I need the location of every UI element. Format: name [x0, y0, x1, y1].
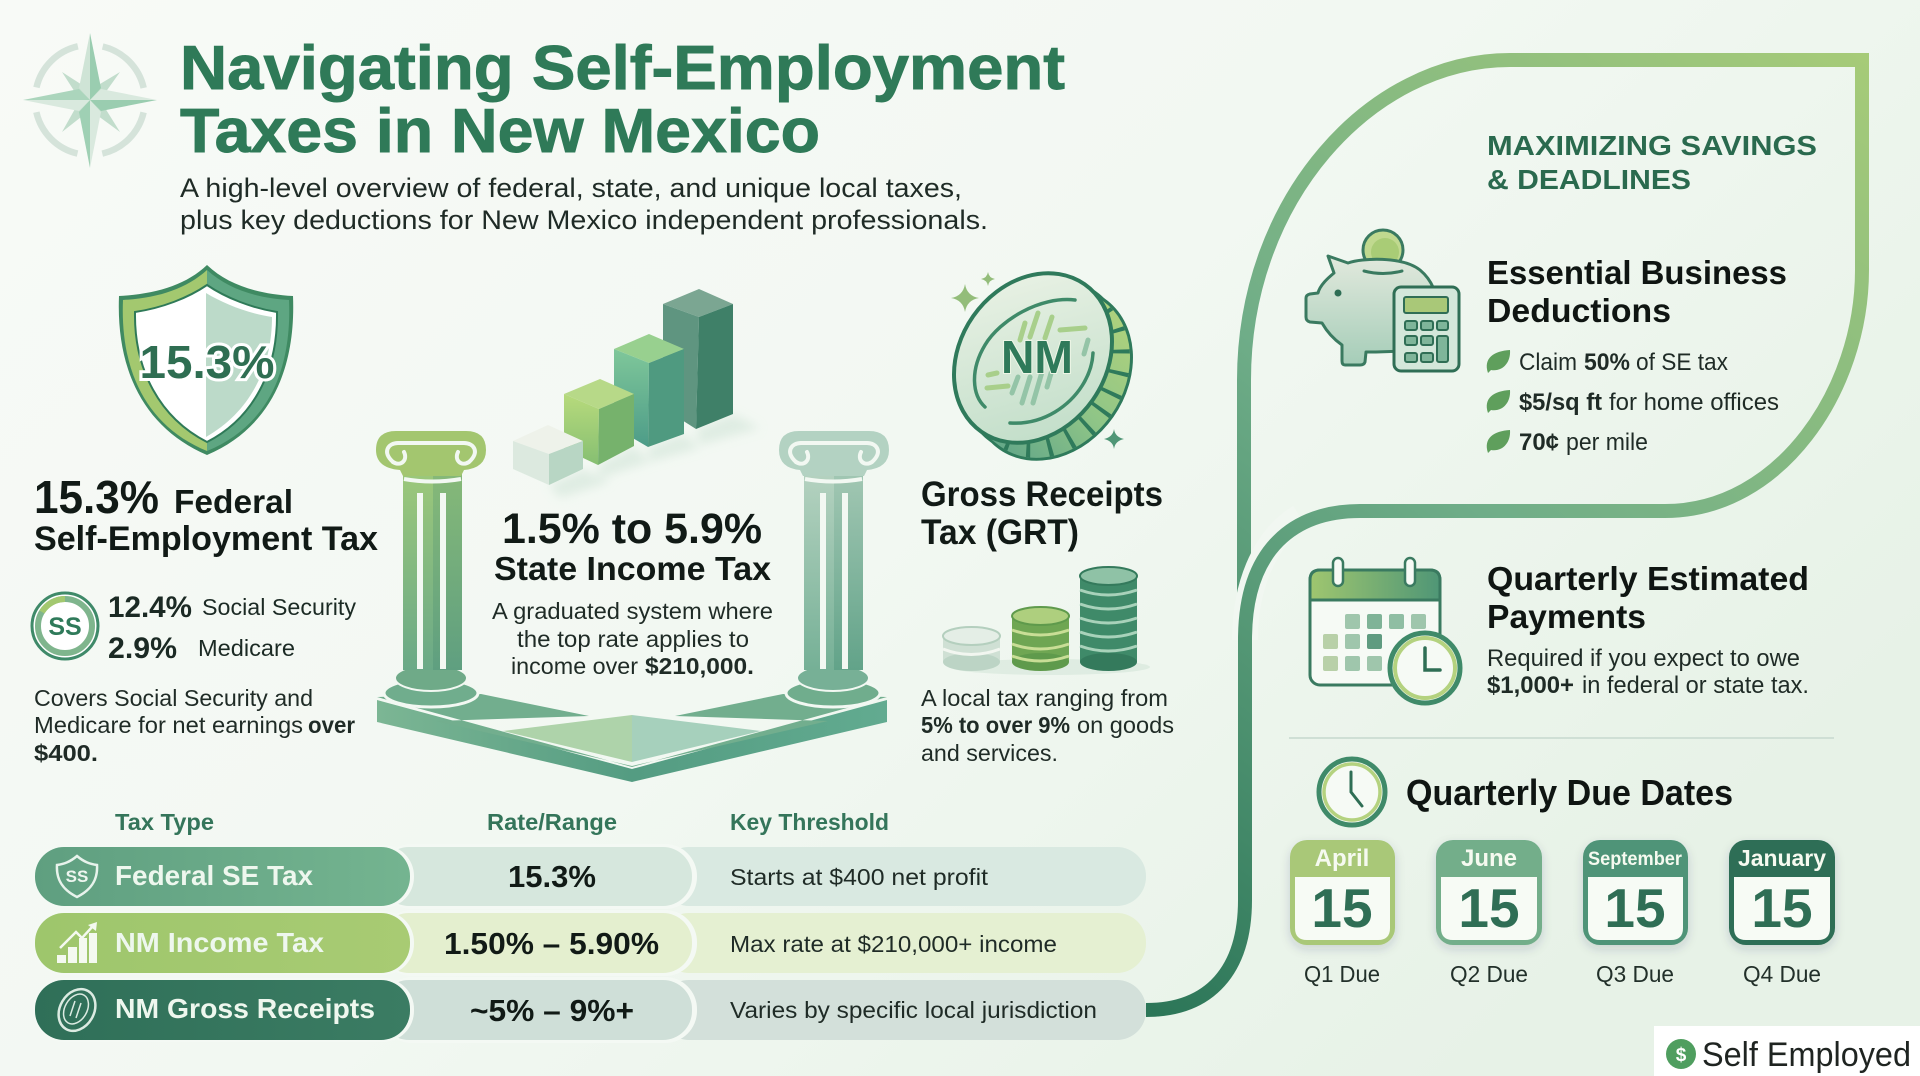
leaf frame: savings and deadlines: [1146, 60, 1862, 1010]
date card: April 15: Q1 Due: [1304, 961, 1380, 987]
icon: coin stacks: [943, 567, 1150, 675]
state description: the top rate applies to: [517, 626, 749, 652]
bullet: mileage: per mile: [1566, 429, 1648, 456]
left column: [376, 431, 486, 707]
panel: federal self-employment tax: [32, 265, 378, 766]
federal description: Covers Social Security and: [34, 685, 313, 711]
date card: January 15: January: [1738, 845, 1826, 871]
quarterly description: $1,000+: [1487, 672, 1574, 699]
GRT description: on goods: [1077, 712, 1174, 738]
icon: small shield: SS: [66, 867, 88, 886]
panel: quarterly estimated payments: [1310, 558, 1809, 703]
right column: [779, 431, 889, 707]
panel: state income tax: [376, 289, 889, 782]
row: federal SE tax: Federal SE Tax: [115, 860, 313, 891]
logo badge: Self Employed: $: [1676, 1045, 1687, 1066]
bullet: 50 percent: 50%: [1584, 349, 1630, 376]
heading: GRT: [921, 475, 1163, 552]
row: federal SE tax: [33, 844, 1146, 909]
bullet: home office: $5/sq ft: [1519, 389, 1602, 416]
heading: federal tax: 15.3%: [34, 471, 159, 523]
federal description: over: [308, 712, 355, 738]
date card: April 15: April: [1315, 845, 1369, 872]
heading: essential deductions: [1487, 254, 1787, 329]
title: [180, 34, 1065, 166]
row: NM gross receipts: NM Gross Receipts: [115, 993, 375, 1024]
date card: April 15: 15: [1311, 877, 1373, 939]
federal description: $400.: [34, 740, 98, 766]
breakdown rates: Medicare: [198, 635, 295, 661]
icon: columns and platform: [376, 431, 889, 782]
subtitle: [180, 173, 988, 235]
GRT description: and services.: [921, 740, 1058, 766]
date card: September 15: September: [1588, 849, 1683, 870]
heading: state income tax: State Income Tax: [494, 550, 772, 587]
panel: quarterly due dates: [1290, 759, 1835, 987]
state description: $210,000.: [645, 653, 754, 679]
panel heading: maximizing savings: [1487, 130, 1817, 195]
breakdown rates: [108, 591, 356, 665]
icon: small bars: [57, 922, 97, 963]
breakdown rates: 12.4%: [108, 591, 192, 624]
row: NM income tax: [33, 910, 1146, 976]
date card: September 15: Q3 Due: [1596, 961, 1674, 987]
state description: A graduated system where: [492, 598, 773, 624]
row: NM gross receipts: ~5% – 9%+: [470, 993, 634, 1028]
table: tax comparison: [33, 809, 1146, 1043]
breakdown rates: Social Security: [202, 594, 356, 620]
state description: income over: [511, 653, 638, 679]
breakdown rates: 2.9%: [108, 632, 177, 665]
subtitle: plus key deductions for New Mexico independent professionals.: [180, 205, 988, 235]
panel: gross receipts tax: [921, 242, 1174, 766]
state description: [492, 598, 773, 679]
quarterly description: [1487, 645, 1809, 699]
date card: June 15: [1436, 840, 1542, 987]
date card: September 15: [1583, 840, 1688, 987]
table headers: Rate/Range: [487, 809, 617, 835]
row: NM gross receipts: [33, 977, 1146, 1043]
icon: NM coin: [952, 271, 1133, 461]
title: Taxes in New Mexico: [180, 97, 820, 166]
date card: January 15: 15: [1751, 877, 1813, 939]
heading: essential deductions: Deductions: [1487, 292, 1671, 329]
icon: calendar with clock: [1310, 558, 1460, 703]
heading: quarterly payments: Quarterly Estimated: [1487, 560, 1809, 597]
bullet: mileage: 70¢: [1519, 429, 1559, 456]
bullet: 50 percent: [1487, 349, 1728, 376]
date card: June 15: Q2 Due: [1450, 961, 1528, 987]
icon: shield 15.3%: 15.3%: [140, 336, 274, 388]
heading: quarterly payments: [1487, 560, 1809, 635]
heading: GRT: Gross Receipts: [921, 475, 1163, 514]
bullet: home office: for home offices: [1609, 389, 1779, 416]
bullet: 50 percent: Claim: [1519, 349, 1577, 376]
federal description: Medicare for net earnings: [34, 712, 303, 738]
icon: clock: [1319, 759, 1385, 825]
icon: sparkles: [951, 272, 1124, 449]
quarterly description: Required if you expect to owe: [1487, 645, 1800, 672]
row: NM income tax: 1.50% – 5.90%: [444, 926, 659, 961]
date card: June 15: 15: [1458, 877, 1520, 939]
icon: small coin: [51, 982, 103, 1038]
subtitle: A high-level overview of federal, state, and unique local taxes,: [180, 173, 962, 203]
row: NM income tax: Max rate at $210,000+ income: [730, 931, 1057, 957]
row: NM gross receipts: Varies by specific local jurisdiction: [730, 997, 1097, 1023]
federal description: [34, 685, 355, 766]
bullet: mileage: [1487, 429, 1648, 456]
row: NM income tax: NM Income Tax: [115, 927, 324, 958]
panel: business deductions: [1306, 230, 1787, 456]
logo badge: Self Employed: Self Employed: [1702, 1036, 1911, 1074]
icon: SS ring: SS: [48, 613, 82, 641]
title: Navigating Self-Employment: [180, 34, 1065, 103]
panel heading: maximizing savings: & DEADLINES: [1487, 164, 1691, 195]
date card: September 15: 15: [1604, 877, 1666, 939]
bullet: home office: [1487, 389, 1779, 416]
quarterly description: in federal or state tax.: [1582, 672, 1809, 699]
table headers: Key Threshold: [730, 809, 889, 835]
row: federal SE tax: Starts at $400 net profit: [730, 864, 989, 890]
heading: due dates: Quarterly Due Dates: [1406, 772, 1733, 813]
heading: state income tax: [494, 505, 772, 587]
date card: January 15: Q4 Due: [1743, 961, 1821, 987]
heading: quarterly payments: Payments: [1487, 598, 1646, 635]
icon: isometric bar chart: [513, 289, 760, 498]
GRT description: 5% to over 9%: [921, 712, 1070, 738]
icon: shield 15.3%: [119, 265, 293, 455]
table headers: [115, 809, 889, 835]
row: federal SE tax: 15.3%: [508, 859, 596, 894]
panel heading: maximizing savings: MAXIMIZING SAVINGS: [1487, 130, 1817, 161]
icon: piggy bank and calculator: [1306, 230, 1459, 371]
date card: April 15: [1290, 840, 1395, 987]
date card: January 15: [1729, 840, 1835, 987]
heading: GRT: Tax (GRT): [921, 513, 1079, 552]
heading: federal tax: Federal: [174, 483, 293, 520]
logo badge: Self Employed: [1654, 1026, 1920, 1076]
bullet: 50 percent: of SE tax: [1636, 349, 1728, 376]
heading: essential deductions: Essential Business: [1487, 254, 1787, 291]
icon: SS ring: [32, 593, 98, 659]
GRT description: [921, 685, 1174, 766]
heading: federal tax: [34, 471, 378, 558]
icon: compass star: [23, 33, 157, 168]
heading: federal tax: Self-Employment Tax: [34, 520, 378, 558]
icon: small shield: [57, 856, 97, 897]
heading: state income tax: 1.5% to 5.9%: [502, 505, 762, 553]
date card: June 15: June: [1461, 845, 1517, 872]
table headers: Tax Type: [115, 809, 214, 835]
GRT description: A local tax ranging from: [921, 685, 1168, 711]
icon: NM coin: NM: [1001, 331, 1073, 383]
